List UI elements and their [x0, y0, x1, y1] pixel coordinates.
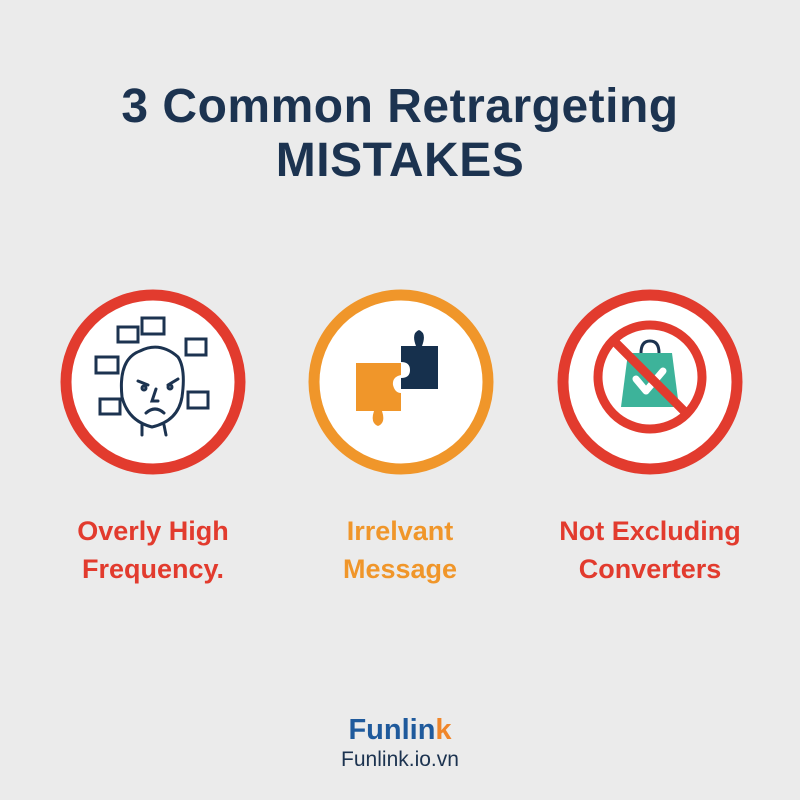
- title: [121, 80, 679, 187]
- label: overly high frequency: [77, 516, 229, 584]
- label: not excluding converters: [559, 516, 741, 584]
- label: irrelevant message: Irrelvant: [347, 516, 453, 546]
- title: 3 Common Retrargeting: [121, 80, 679, 133]
- icon: puzzle: [308, 290, 494, 474]
- puzzle orange: [356, 363, 401, 426]
- label: not excluding converters: Converters: [579, 554, 721, 584]
- footer logo: Funlink: [348, 714, 452, 746]
- puzzle dark: [401, 330, 438, 389]
- title: MISTAKES: [276, 134, 524, 187]
- label: not excluding converters: Not Excluding: [559, 516, 741, 546]
- icon: overly high frequency: [60, 290, 246, 474]
- icon: no shopping bag: [558, 290, 742, 474]
- label: overly high frequency: Overly High: [77, 516, 229, 546]
- label: irrelevant message: [343, 516, 457, 584]
- footer logo: Funlink.io.vn: [341, 748, 459, 771]
- label: irrelevant message: Message: [343, 554, 457, 584]
- footer logo: [341, 714, 459, 771]
- label: overly high frequency: Frequency.: [82, 554, 224, 584]
